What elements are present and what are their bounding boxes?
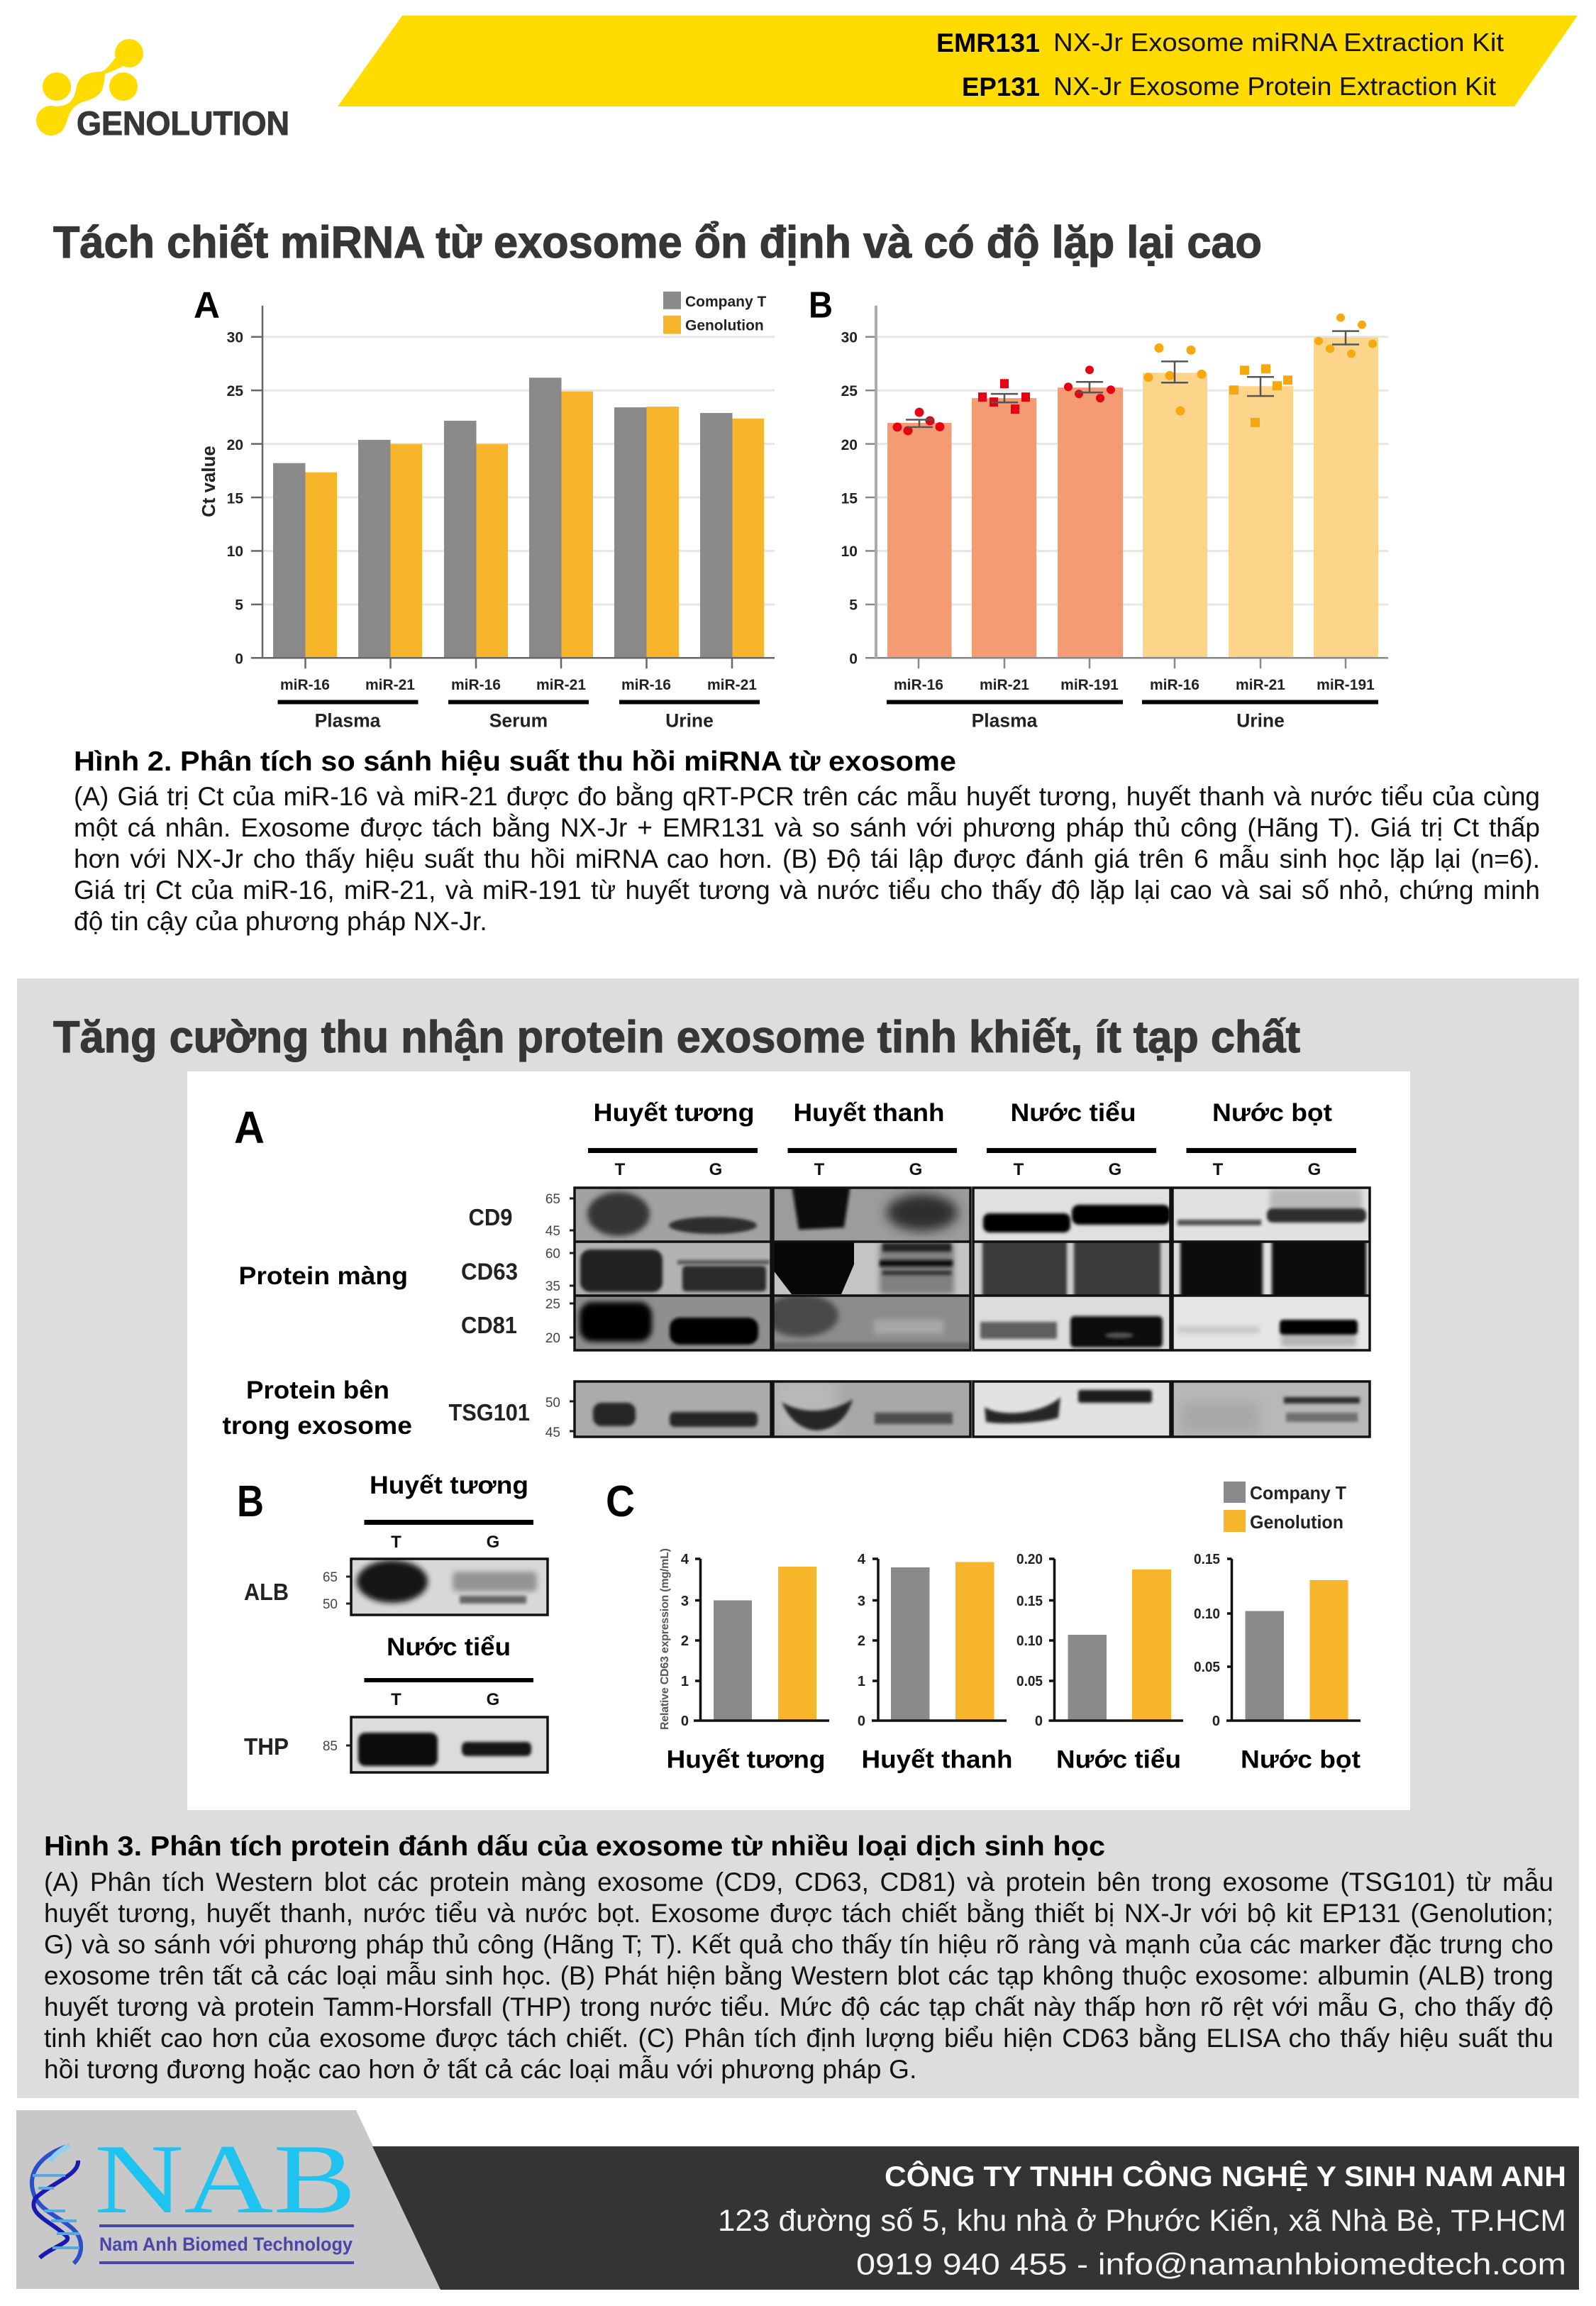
- western blot A: 50: [545, 1396, 560, 1411]
- bar chart A: Ct value comparison: Plasma: [315, 710, 381, 731]
- caption: figure 3 text: tinh khiết cao hơn của exosome được tách chiết. (C) Phân tích định lượng biểu hiện CD63 bằng ELISA cho thấy hiệu suất thu: [44, 2024, 1553, 2053]
- bar chart A: Ct value comparison: 20: [227, 437, 243, 453]
- footer: contact bar: [372, 2146, 1579, 2290]
- western blot B: G: [487, 1533, 499, 1552]
- western blot A: CD9: [468, 1204, 512, 1230]
- western blot A: TSG101: [448, 1399, 530, 1425]
- caption: figure 2 text: hơn với NX-Jr cho thấy hiệu suất thu hồi miRNA cao hơn. (B) Độ tái lập được đánh giá trên 6 mẫu sinh học lặp lại (n=6).: [74, 844, 1540, 873]
- chart: saliva: 0.05: [1194, 1660, 1220, 1675]
- panel: white figure area: [187, 1071, 1410, 1810]
- footer: logo panel: [16, 2110, 440, 2289]
- bar chart B: reproducibility: 0: [849, 651, 858, 667]
- blot column: saliva: [1173, 1188, 1370, 1437]
- chart: urine: [1016, 1552, 1183, 1774]
- chart: urine: 0.20: [1016, 1552, 1043, 1567]
- western blot A: A: [234, 1102, 265, 1153]
- bar chart B: reproducibility: 5: [849, 597, 858, 614]
- heading: figure 3: Hình 3. Phân tích protein đánh dấu của exosome từ nhiều loại dịch sinh học: [44, 1831, 1105, 1862]
- chart: serum: 3: [858, 1594, 865, 1609]
- bar chart B: reproducibility: Urine: [1236, 710, 1285, 731]
- icon: DNA helix: [32, 2146, 81, 2263]
- THP blot: [351, 1717, 548, 1772]
- chart: plasma: 1: [681, 1674, 689, 1689]
- bar chart A: Ct value comparison: 5: [235, 597, 243, 614]
- chart: saliva: 0: [1212, 1714, 1220, 1729]
- legend: Company T: [1250, 1482, 1346, 1504]
- caption: figure 2 text: độ tin cậy của phương pháp NX-Jr.: [74, 907, 487, 936]
- bar chart A: Ct value comparison: miR-16: [621, 677, 671, 693]
- bar chart A: Ct value comparison: 30: [227, 330, 243, 346]
- legend: Genolution: [685, 318, 764, 334]
- chart: saliva: Nước bọt: [1241, 1745, 1361, 1774]
- western blot A: [223, 1099, 1370, 1440]
- data points urine: [1143, 314, 1377, 427]
- error bars: [906, 331, 1359, 427]
- western blot B: THP: [244, 1733, 289, 1760]
- logo wordmark NAB: NAB: [94, 2124, 356, 2234]
- bar chart B: reproducibility: Plasma: [972, 710, 1038, 731]
- sample headers: Nước bọt: [1212, 1099, 1332, 1127]
- bar chart A: Ct value comparison: Ct value: [199, 446, 219, 517]
- footer: contact bar: CÔNG TY TNHH CÔNG NGHỆ Y SINH NAM ANH: [885, 2160, 1566, 2192]
- chart: saliva: 0.15: [1194, 1552, 1220, 1567]
- chart: serum: 1: [858, 1674, 865, 1689]
- bar chart A: Ct value comparison: miR-16: [451, 677, 501, 693]
- footer: contact bar: 123 đường số 5, khu nhà ở Phước Kiển, xã Nhà Bè, TP.HCM: [718, 2204, 1566, 2238]
- caption: figure 3 text: huyết tương và protein Tamm-Horsfall (THP) trong nước tiểu. Mức độ các tạp chất này thấp hơn rõ rệt với mẫu G, cho thấy độ: [44, 1992, 1553, 2021]
- chart: serum: [858, 1552, 1013, 1774]
- bar chart B: reproducibility: miR-16: [1150, 677, 1199, 693]
- bar chart B: reproducibility: 20: [841, 437, 858, 453]
- bar chart B: reproducibility: 15: [841, 490, 858, 507]
- footer: contact bar: 0919 940 455 - info@namanhbiomedtech.com: [856, 2248, 1566, 2282]
- legend: Genolution: [1250, 1511, 1343, 1533]
- caption: figure 3 text: [44, 1868, 1553, 2084]
- bar chart A: Ct value comparison: miR-21: [365, 677, 415, 693]
- western blot A: 60: [545, 1247, 560, 1262]
- western blot A: 65: [545, 1192, 560, 1207]
- western blot B: Nước tiểu: [387, 1633, 511, 1661]
- chart group C: CD63 ELISA: C: [606, 1477, 635, 1526]
- row labels: [223, 1262, 412, 1440]
- western blot A: 35: [545, 1279, 560, 1294]
- western blot B: T: [391, 1533, 401, 1552]
- bar chart A: Ct value comparison: 15: [227, 490, 243, 507]
- caption: figure 2 text: [74, 782, 1540, 936]
- row labels: trong exosome: [223, 1412, 412, 1440]
- caption: figure 3 text: hồi tương đương hoặc cao hơn ở tất cả các loại mẫu với phương pháp G.: [44, 2055, 917, 2084]
- title: protein section: Tăng cường thu nhận protein exosome tinh khiết, ít tạp chất: [53, 1013, 1300, 1062]
- chart: serum: 4: [858, 1552, 866, 1567]
- bar chart A: Ct value comparison: miR-21: [536, 677, 586, 693]
- chart: plasma: [667, 1552, 829, 1774]
- chart: saliva: [1194, 1552, 1361, 1774]
- western blot A: 20: [545, 1331, 560, 1346]
- western blot A: 45: [545, 1224, 560, 1239]
- chart: urine: 0: [1035, 1714, 1043, 1729]
- western blot A: 45: [545, 1425, 560, 1440]
- chart: serum: 2: [858, 1633, 865, 1649]
- western blot A: CD63: [461, 1259, 518, 1284]
- caption: figure 3 text: (A) Phân tích Western blot các protein màng exosome (CD9, CD63, CD81) và protein bên trong exosome (TSG101) từ mẫu: [44, 1868, 1553, 1897]
- chart: plasma: 0: [681, 1714, 689, 1729]
- western blot B: B: [237, 1477, 264, 1526]
- legend: [1224, 1482, 1346, 1533]
- chart: plasma: 2: [681, 1633, 689, 1649]
- sample headers: Huyết thanh: [793, 1099, 945, 1127]
- bar chart B: reproducibility: miR-21: [980, 677, 1029, 693]
- product line EP131: EP131: [962, 72, 1040, 101]
- product line EMR131: EMR131: [936, 28, 1040, 57]
- chart: plasma: Huyết tương: [667, 1745, 826, 1774]
- bar chart B: reproducibility: miR-191: [1060, 677, 1119, 693]
- western blot B: T: [391, 1690, 401, 1709]
- heading: figure 2: Hình 2. Phân tích so sánh hiệu suất thu hồi miRNA từ exosome: [74, 746, 956, 777]
- bar chart A: Ct value comparison: 10: [227, 544, 243, 560]
- bar chart A: Ct value comparison: Urine: [665, 710, 714, 731]
- western blot A: G: [709, 1160, 722, 1179]
- bar chart A: Ct value comparison: A: [194, 285, 220, 326]
- bar chart A: Ct value comparison: [194, 285, 775, 731]
- bar chart B: reproducibility: 10: [841, 544, 858, 560]
- ALB blot: [351, 1559, 548, 1615]
- row labels: Protein bên: [246, 1377, 389, 1404]
- bar chart A: Ct value comparison: miR-16: [280, 677, 330, 693]
- footer: logo panel: Nam Anh Biomed Technology: [99, 2234, 353, 2255]
- logo: Genolution: [36, 39, 289, 142]
- chart: urine: Nước tiểu: [1056, 1745, 1181, 1774]
- western blot A: 25: [545, 1297, 560, 1312]
- chart: urine: 0.05: [1016, 1674, 1043, 1689]
- chart: urine: 0.15: [1016, 1594, 1043, 1609]
- bar chart B: reproducibility: miR-16: [894, 677, 943, 693]
- legend: Company T: [685, 294, 766, 310]
- logo: Genolution: GENOLUTION: [77, 104, 289, 142]
- caption: figure 2 text: (A) Giá trị Ct của miR-16 và miR-21 được đo bằng qRT-PCR trên các mẫu huyết tương, huyết thanh và nước tiểu của cùng: [74, 782, 1540, 811]
- row labels: Protein màng: [238, 1262, 408, 1290]
- western blot A: G: [1308, 1160, 1321, 1179]
- blot frames: [575, 1188, 1370, 1437]
- bar chart B: reproducibility: B: [809, 285, 833, 326]
- title: miRNA section: Tách chiết miRNA từ exosome ổn định và có độ lặp lại cao: [53, 218, 1262, 267]
- bar chart A: Ct value comparison: miR-21: [707, 677, 757, 693]
- western blot B: ALB: [244, 1579, 289, 1605]
- chart group C: CD63 ELISA: Relative CD63 expression (mg/mL): [659, 1548, 671, 1730]
- chart: plasma: 4: [681, 1552, 689, 1567]
- legend: [663, 292, 766, 334]
- bar chart B: reproducibility: 30: [841, 330, 858, 346]
- western blot B: 50: [323, 1597, 338, 1612]
- data points plasma: [892, 365, 1115, 435]
- blot column: plasma: [575, 1188, 771, 1437]
- sample headers: Huyết tương: [593, 1099, 755, 1127]
- bar chart B: reproducibility: miR-191: [1317, 677, 1375, 693]
- product line EMR131: NX-Jr Exosome miRNA Extraction Kit: [1053, 28, 1504, 57]
- caption: figure 3 text: G) và so sánh với phương pháp thủ công (Hãng T; T). Kết quả cho thấy tín hiệu rõ ràng và mạnh của các marker đặc trưng cho: [44, 1930, 1553, 1959]
- caption: figure 3 text: exosome trên tất cả các loại mẫu sinh học. (B) Phát hiện bằng Western blot các tạp không thuộc exosome: albumin (ALB) trong: [44, 1961, 1553, 1990]
- bar chart B: reproducibility: miR-21: [1236, 677, 1285, 693]
- western blot B: 85: [323, 1739, 338, 1754]
- caption: figure 2 text: một cá nhân. Exosome được tách bằng NX-Jr + EMR131 và so sánh với phương pháp thủ công (Hãng T). Giá trị Ct thấp: [74, 813, 1540, 842]
- western blot A: G: [909, 1160, 922, 1179]
- chart: serum: 0: [858, 1714, 865, 1729]
- western blot A: T: [1213, 1160, 1224, 1179]
- western blot B: [237, 1472, 548, 1772]
- western blot A: T: [1014, 1160, 1024, 1179]
- sample headers: Nước tiểu: [1010, 1099, 1136, 1127]
- bar chart B: reproducibility: 25: [841, 383, 858, 399]
- western blot A: T: [814, 1160, 825, 1179]
- western blot B: G: [487, 1690, 499, 1709]
- chart: plasma: 3: [681, 1594, 689, 1609]
- western blot B: 65: [323, 1570, 338, 1585]
- bar chart B: reproducibility: [809, 285, 1388, 731]
- blot column: urine: [973, 1188, 1170, 1437]
- bar chart A: Ct value comparison: 25: [227, 383, 243, 399]
- western blot A: G: [1109, 1160, 1121, 1179]
- bar chart A: Ct value comparison: Serum: [489, 710, 548, 731]
- western blot B: Huyết tương: [370, 1472, 528, 1499]
- caption: figure 3 text: huyết tương, huyết thanh, nước tiểu và nước bọt. Exosome được tách chiết bằng thiết bị NX-Jr với bộ kit EP131 (Genolution;: [44, 1899, 1553, 1928]
- blot column: serum: [765, 1185, 970, 1437]
- western blot A: T: [615, 1160, 626, 1179]
- chart: urine: 0.10: [1016, 1633, 1043, 1649]
- chart: serum: Huyết thanh: [861, 1745, 1013, 1774]
- panel: protein section background: [17, 978, 1579, 2098]
- chart group C: CD63 ELISA: [606, 1477, 1361, 1774]
- header banner: [338, 16, 1578, 106]
- product line EP131: NX-Jr Exosome Protein Extraction Kit: [1053, 72, 1496, 101]
- bar chart A: Ct value comparison: 0: [235, 651, 243, 667]
- western blot A: CD81: [461, 1312, 517, 1338]
- chart: saliva: 0.10: [1194, 1606, 1220, 1622]
- sample headers: [593, 1099, 1332, 1127]
- caption: figure 2 text: Giá trị Ct của miR-16, miR-21, và miR-191 từ huyết tương và nước tiểu cho thấy độ lặp lại cao và sai số nhỏ, chứng minh: [74, 876, 1540, 905]
